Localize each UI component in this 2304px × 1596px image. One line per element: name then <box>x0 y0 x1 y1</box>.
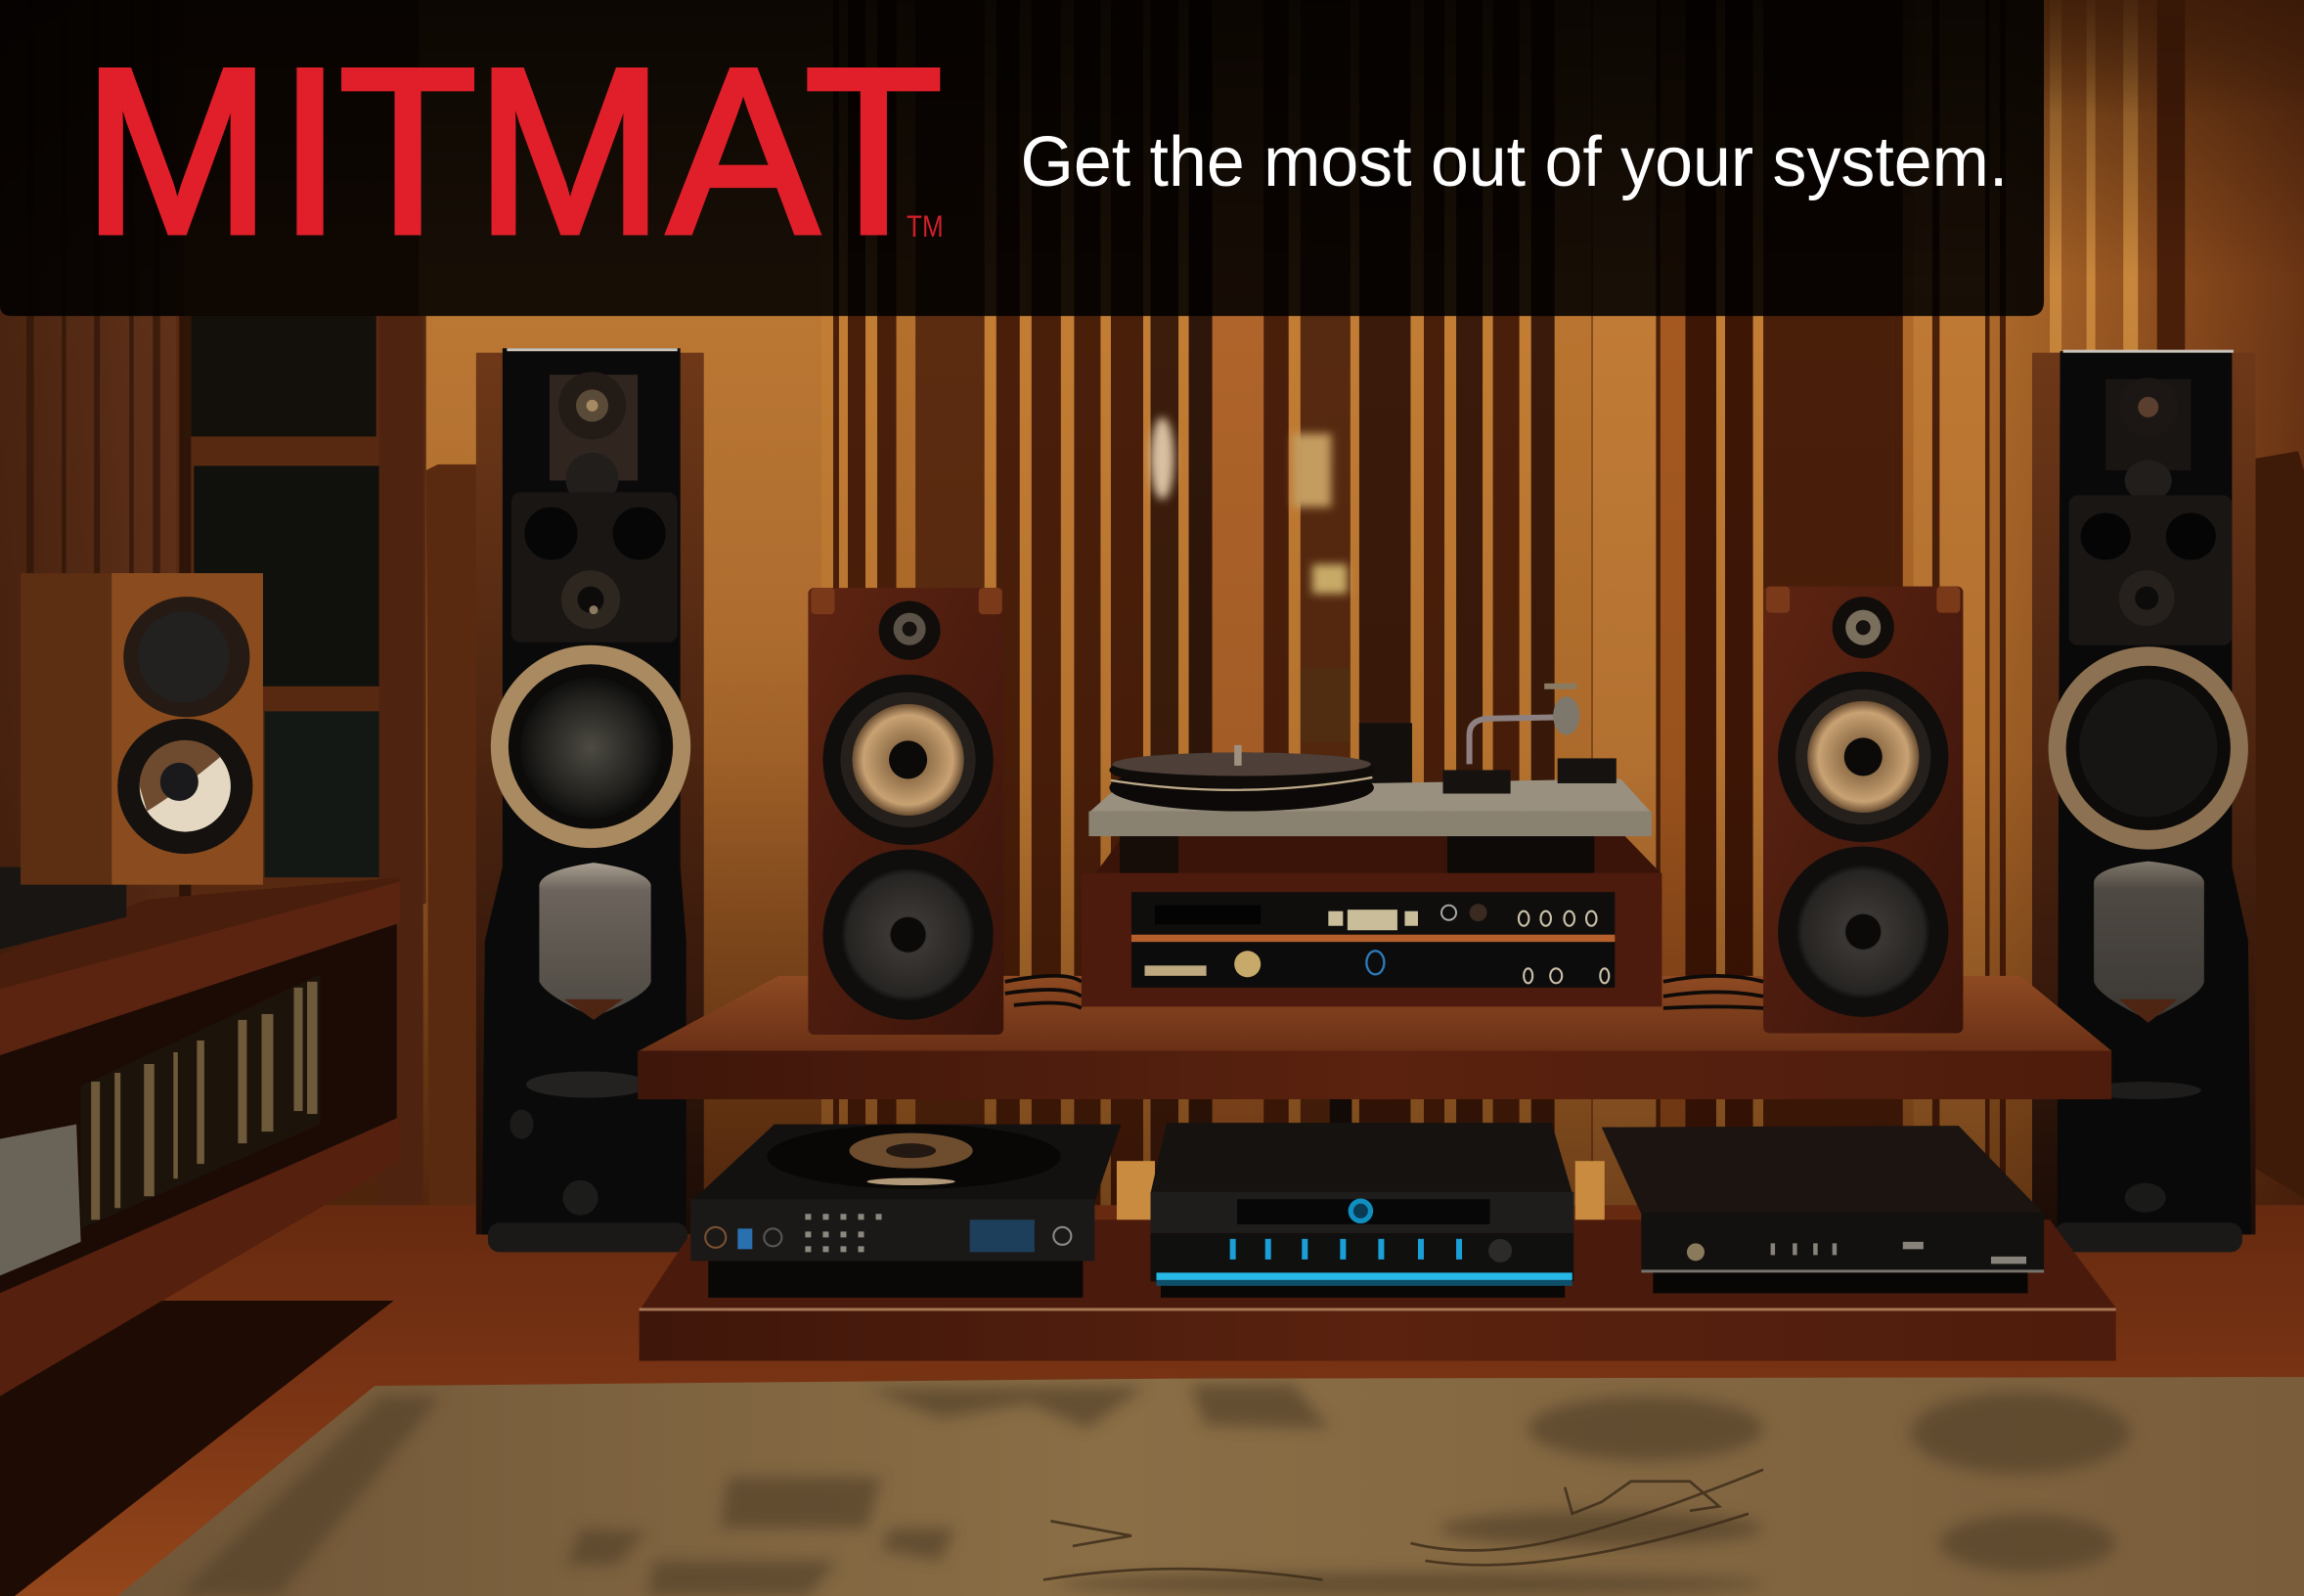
left alcove dark panels <box>176 316 489 1249</box>
centre window with lit shelves <box>1150 418 1412 790</box>
records <box>81 974 321 1228</box>
grey badge plate <box>2094 862 2204 1020</box>
lower platform <box>640 1161 2116 1361</box>
component: left turntable receiver <box>690 1125 1121 1298</box>
component: right disc player <box>1602 1126 2044 1293</box>
dark slats <box>833 0 2185 1264</box>
platter <box>1109 745 1374 812</box>
rug <box>117 1377 2304 1596</box>
knobs <box>1441 906 1456 920</box>
woofer <box>491 645 690 848</box>
bookshelf speaker, left <box>808 588 1003 1035</box>
bookshelf speaker, right <box>1763 587 1963 1033</box>
light slats <box>821 0 2138 1264</box>
grey badge plate <box>539 863 651 1017</box>
amplifier cabinet <box>1082 835 1662 1006</box>
cables <box>1005 976 1763 1008</box>
turntable <box>1088 684 1652 873</box>
background: wood panelled wall <box>0 0 2304 1264</box>
lower shelf device <box>0 1125 81 1275</box>
fine lines on far left panel <box>26 0 160 882</box>
component: centre amplifier with blue lights <box>1150 1123 1573 1298</box>
tall floor speaker, right <box>2032 350 2255 1252</box>
tall floor speaker, left <box>476 348 704 1252</box>
display and meters <box>1155 906 1261 924</box>
upper table <box>638 976 2111 1166</box>
tagline: Get the most out of your system. <box>1021 123 2008 201</box>
small component on shelf <box>0 867 126 950</box>
logo wordmark: MITMAT <box>83 20 943 283</box>
floor <box>0 1205 2304 1596</box>
header band <box>0 0 2044 316</box>
small wooden speaker, left <box>21 573 263 885</box>
speaker wall shadows <box>426 451 2304 1208</box>
left shelf unit with records <box>0 867 400 1396</box>
tonearm <box>1443 684 1617 793</box>
woofer <box>2049 646 2248 850</box>
trademark: TM <box>907 208 944 244</box>
